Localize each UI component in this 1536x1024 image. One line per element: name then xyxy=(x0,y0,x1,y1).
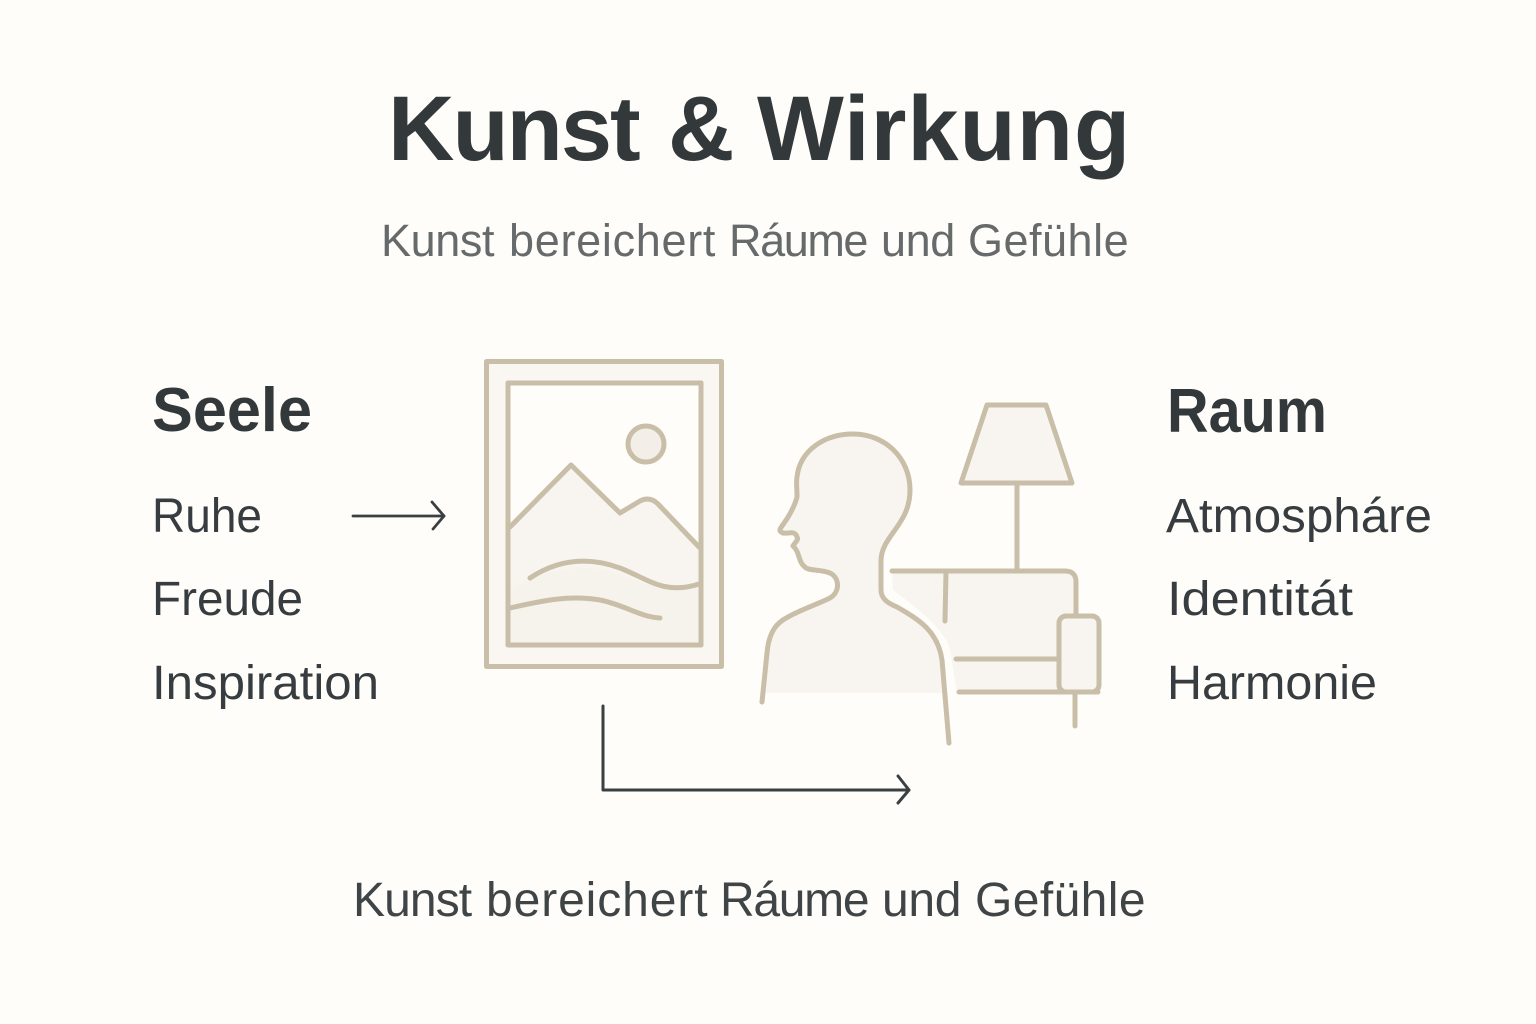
footer caption: Gefühle xyxy=(975,874,1146,927)
sofa bottom line xyxy=(959,690,1098,694)
heading: Raum: Raum xyxy=(1167,377,1327,446)
footer caption: Ráume xyxy=(720,874,868,927)
title: Wirkung xyxy=(757,78,1131,180)
lamp shade xyxy=(961,405,1072,483)
foreground stipple band xyxy=(510,568,699,643)
sofa leg xyxy=(1072,692,1078,726)
person outline xyxy=(762,434,949,743)
lower wave xyxy=(510,598,660,618)
sofa back xyxy=(892,571,1076,614)
subtitle: und xyxy=(881,215,955,266)
mountains fill xyxy=(510,465,699,643)
item: Inspiration: Inspiration xyxy=(152,657,379,710)
item: Harmonie: Harmonie xyxy=(1167,657,1377,710)
sofa seat line xyxy=(956,656,1059,662)
icon: sofa and lamp xyxy=(892,405,1099,726)
arrow: Seele to artwork xyxy=(353,502,444,529)
title: Kunst xyxy=(388,78,640,180)
footer caption: und xyxy=(882,874,961,927)
subtitle: Gefühle xyxy=(968,215,1129,266)
subtitle: bereichert xyxy=(509,215,716,266)
title: & xyxy=(668,78,734,180)
subtitle: Kunst xyxy=(381,215,495,266)
sun xyxy=(628,426,664,462)
panel: Raum list xyxy=(1166,377,1432,710)
item: Freude: Freude xyxy=(152,573,303,626)
picture area xyxy=(508,383,701,645)
icon: framed landscape picture xyxy=(486,362,722,666)
lamp pole xyxy=(1014,483,1020,571)
sofa fill xyxy=(892,572,1076,692)
item: Identität: Identitát xyxy=(1167,573,1353,626)
item: Ruhe: Ruhe xyxy=(152,490,262,543)
mountains outline xyxy=(510,465,699,547)
panel: Seele list xyxy=(152,376,379,710)
person fill xyxy=(765,434,945,693)
item: Atmosphäre: Atmospháre xyxy=(1166,490,1432,543)
icon: person silhouette xyxy=(762,434,949,743)
inner frame redraw xyxy=(508,383,701,645)
subtitle: Ráume xyxy=(729,215,867,266)
sofa divider xyxy=(945,572,946,621)
heading: Seele: Seele xyxy=(152,376,312,445)
footer caption: Kunst xyxy=(353,874,472,927)
arrow: artwork to person xyxy=(603,706,909,803)
frame xyxy=(486,362,722,666)
footer caption: bereichert xyxy=(486,874,708,927)
upper wave xyxy=(530,561,699,588)
sofa arm xyxy=(1059,616,1099,692)
